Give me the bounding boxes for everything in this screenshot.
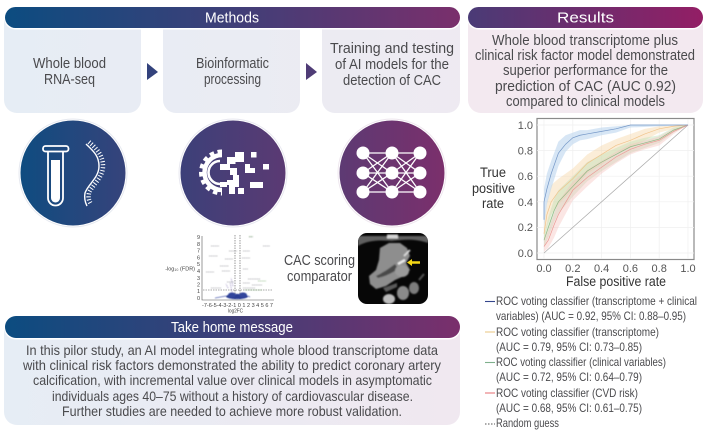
legend: Random guess — [496, 416, 559, 430]
image: CT scan with yellow arrow — [358, 233, 428, 304]
volcano y axis labels: 4 — [197, 269, 200, 275]
x axis ticks: 1.0 — [680, 263, 696, 275]
volcano y axis labels: 3 — [197, 276, 200, 282]
take home text — [22, 342, 441, 419]
arrow: step 2 to step 3 — [306, 63, 317, 80]
volcano x axis labels — [202, 303, 273, 314]
heading: methods: Methods — [205, 10, 259, 26]
x axis title: False positive rate — [566, 274, 666, 289]
legend: ROC voting classifier (transcriptome) — [496, 325, 659, 339]
legend: (AUC = 0.72, 95% CI: 0.64–0.79) — [496, 370, 642, 384]
methods step 1 card: Whole blood — [33, 56, 106, 72]
volcano y axis labels: 8 — [197, 242, 200, 248]
take home text: with clinical risk factors demonstrated the ability to predict coronary artery — [22, 357, 441, 373]
take home text: Further studies are needed to achieve more robust validation. — [62, 403, 402, 419]
methods step 3 card: of AI models for the — [335, 57, 449, 73]
x axis ticks — [536, 263, 696, 275]
methods step 1 card — [4, 20, 141, 113]
legend: ROC voting classifier (CVD risk) — [496, 386, 638, 400]
x axis ticks: 0.0 — [536, 263, 552, 275]
plot frame — [537, 118, 694, 260]
heading: results: Results — [557, 10, 614, 26]
heading: take home message: Take home message — [171, 320, 293, 336]
volcano y axis labels: 6 — [197, 256, 200, 262]
methods step 2 card — [163, 20, 300, 113]
methods step 3 card — [322, 20, 460, 113]
take home text: In this pilor study, an AI model integrating whole blood transcriptome data — [26, 342, 438, 358]
icon: RNA strand — [85, 142, 103, 206]
icon: test tube and RNA strand — [19, 119, 127, 227]
methods step 2 card: Bioinformatic — [196, 56, 269, 72]
label: CAC scoring comparator: comparator — [287, 269, 352, 285]
volcano y axis labels: 2 — [197, 282, 200, 288]
results text: Whole blood transcriptome plus — [492, 33, 678, 49]
panel: take home message — [4, 315, 461, 425]
volcano y axis labels: 5 — [197, 262, 200, 268]
y axis title: True — [480, 165, 506, 180]
volcano x axis labels: -7-6-5-4-3-2-1 0 1 2 3 4 5 6 7 — [202, 303, 273, 309]
x axis ticks: 0.6 — [623, 263, 638, 275]
legend: ROC voting classifier (clinical variables) — [496, 355, 666, 369]
ROC curves and confidence bands — [544, 125, 688, 253]
methods step 3 card: detection of CAC — [343, 73, 441, 89]
methods step 1 card: RNA-seq — [44, 72, 95, 88]
y axis ticks: 0.6 — [518, 171, 533, 183]
y axis ticks: 1.0 — [518, 120, 533, 132]
y axis ticks — [518, 120, 533, 260]
arrow: step 1 to step 2 — [147, 63, 158, 80]
y axis ticks: 0.8 — [518, 146, 533, 158]
results text — [475, 33, 695, 110]
x axis ticks: 0.8 — [652, 263, 667, 275]
methods step 3 card: Training and testing — [330, 41, 454, 57]
volcano y axis labels — [165, 235, 200, 302]
x axis ticks: 0.2 — [565, 263, 580, 275]
y axis ticks: 0.0 — [518, 248, 533, 260]
panel: results — [467, 6, 704, 113]
x axis ticks: 0.4 — [594, 263, 609, 275]
volcano x axis labels: log2FC — [228, 308, 243, 314]
volcano y axis labels: 7 — [197, 248, 200, 254]
results text: prediction of CAC (AUC 0.92) — [495, 79, 676, 95]
yellow arrow — [407, 259, 420, 266]
take home text: calcification, with incremental value over clinical models in asymptomatic — [33, 372, 432, 388]
results text: superior performance for the — [503, 63, 668, 79]
y axis title: positive — [472, 181, 515, 196]
icon: test tube — [43, 146, 68, 206]
take home text: individuals ages 40–75 without a history of cardiovascular disease. — [52, 388, 413, 404]
volcano scatter — [206, 236, 270, 299]
legend — [485, 294, 697, 430]
volcano y axis labels: -log₁₀ (FDR) — [165, 266, 195, 272]
heading: methods — [4, 6, 461, 30]
methods step 2 card: processing — [204, 72, 261, 88]
label: CAC scoring comparator: CAC scoring — [284, 253, 355, 269]
volcano y axis labels: 1 — [197, 289, 200, 295]
legend: (AUC = 0.79, 95% CI: 0.73–0.85) — [496, 340, 642, 354]
heading: take home message — [4, 315, 461, 340]
icon: gear and data squares — [179, 119, 287, 227]
volcano y axis labels: 0 — [197, 296, 200, 302]
icon: neural network — [338, 119, 446, 227]
heading: results — [467, 6, 704, 30]
panel: methods — [4, 6, 461, 113]
chart: ROC curves — [472, 118, 696, 289]
y axis ticks: 0.4 — [518, 197, 533, 209]
legend: (AUC = 0.68, 95% CI: 0.61–0.75) — [496, 401, 642, 415]
volcano y axis labels: 9 — [197, 235, 200, 241]
y axis title: rate — [482, 196, 504, 211]
y axis title — [472, 165, 515, 211]
chart: volcano plot — [165, 235, 274, 314]
results text: compared to clinical models — [506, 94, 665, 110]
label: CAC scoring comparator — [284, 253, 355, 285]
y axis ticks: 0.2 — [518, 222, 533, 234]
